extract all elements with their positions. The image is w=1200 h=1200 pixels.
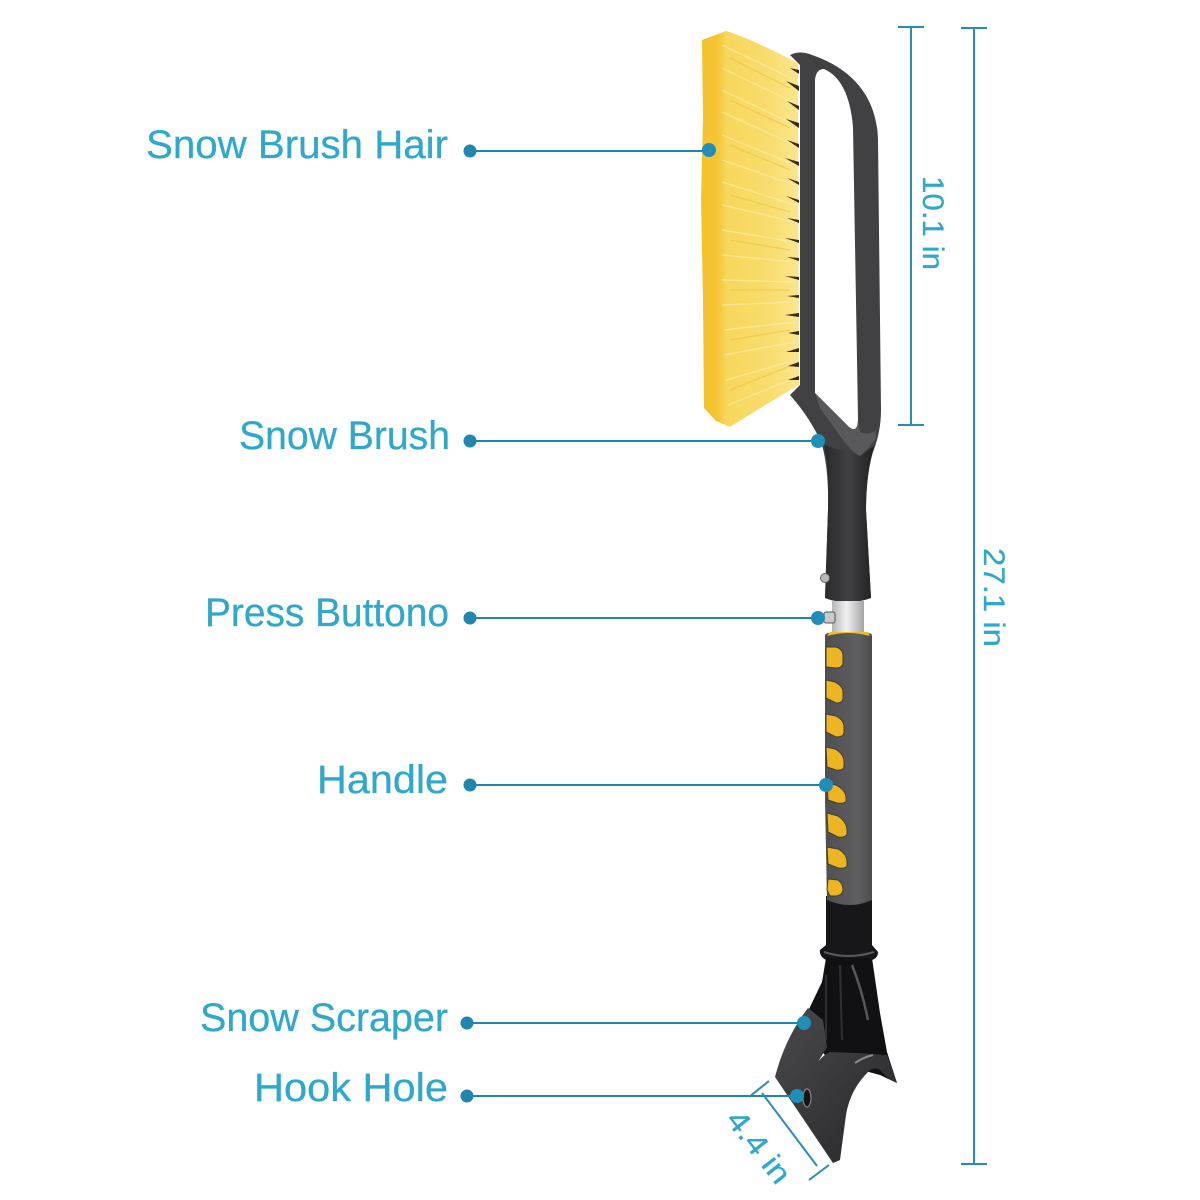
press button bbox=[824, 612, 835, 623]
callout: handle bbox=[317, 758, 833, 802]
handle frame and loop bbox=[790, 52, 881, 602]
dimension: 27.1 in bbox=[961, 28, 1010, 1164]
side button bbox=[820, 574, 830, 582]
scraper fork bbox=[800, 958, 897, 1083]
bristle gaps bbox=[785, 68, 799, 380]
callout: snow brush bbox=[239, 414, 825, 458]
scraper bbox=[775, 896, 897, 1163]
yellow grip pads bbox=[826, 647, 847, 896]
blade gloss bbox=[855, 1055, 873, 1063]
dimension: 10.1 in: 10.1 in bbox=[916, 176, 949, 270]
foam grip bbox=[825, 633, 872, 905]
brush hair bbox=[701, 31, 799, 427]
grip collar bbox=[827, 632, 870, 636]
callout: hook hole bbox=[254, 1066, 804, 1110]
scraper blade bbox=[775, 1008, 897, 1163]
snow brush tool bbox=[701, 31, 897, 1163]
scraper neck bbox=[820, 896, 878, 960]
callout: snow brush hair bbox=[146, 123, 716, 167]
hook hole bbox=[803, 1089, 811, 1107]
dimension: 4.4 in: 4.4 in bbox=[719, 1104, 797, 1191]
callout: handle: Handle bbox=[317, 758, 448, 802]
callout: snow scraper: Snow Scraper bbox=[200, 996, 448, 1040]
neck collar highlight bbox=[824, 952, 874, 956]
dimension: 10.1 in bbox=[898, 27, 949, 425]
aluminium tube bbox=[832, 601, 864, 633]
lower handle shaft bbox=[824, 445, 874, 602]
callout: snow brush hair: Snow Brush Hair bbox=[146, 123, 448, 167]
callout: snow brush: Snow Brush bbox=[239, 414, 450, 458]
callout: press button bbox=[205, 591, 825, 635]
Y junction band bbox=[815, 393, 876, 456]
callout: hook hole: Hook Hole bbox=[254, 1066, 448, 1110]
dimension: 27.1 in: 27.1 in bbox=[977, 548, 1010, 647]
callout: snow scraper bbox=[200, 996, 811, 1040]
callout: press button: Press Buttono bbox=[205, 591, 449, 635]
dimension: 4.4 in bbox=[719, 1081, 829, 1191]
